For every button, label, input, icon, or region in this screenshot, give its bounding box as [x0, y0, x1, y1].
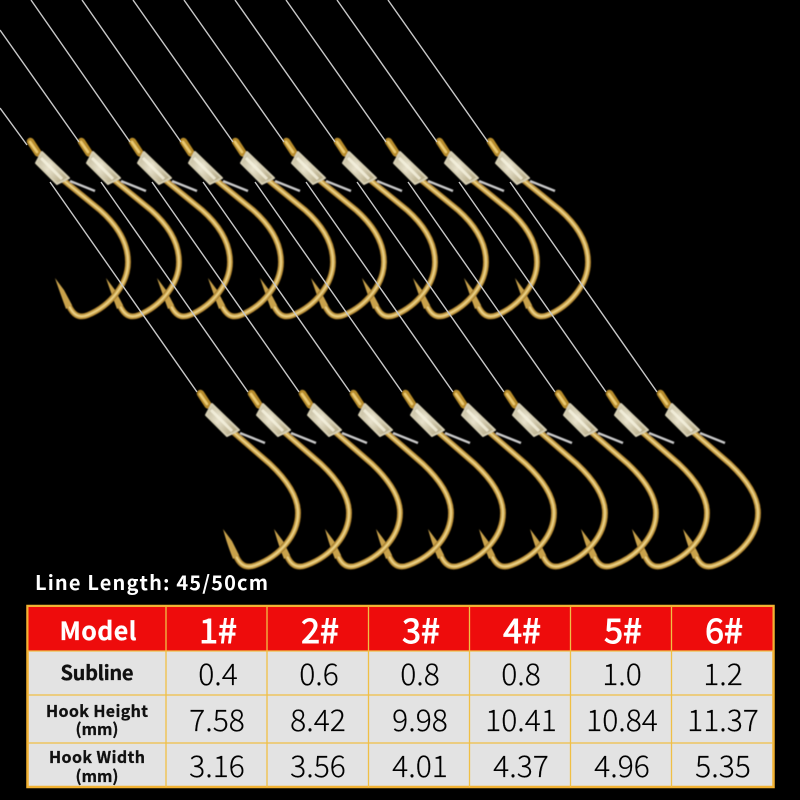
hook height row: 11.37 [687, 696, 759, 740]
hook bottom 5 [405, 394, 503, 567]
hook width row: 4.96 [594, 742, 650, 786]
hook width row [49, 742, 751, 787]
header row: 2# [301, 604, 339, 653]
subline row [60, 650, 743, 694]
hook top 10 [490, 142, 588, 316]
grid lines [28, 607, 773, 787]
header row: 3# [402, 604, 440, 653]
hook top 5 [235, 142, 333, 316]
specification table [28, 604, 774, 787]
hook height row: (mm) [76, 716, 118, 740]
hook height row: 10.84 [586, 696, 658, 740]
subline row: 0.8 [501, 650, 541, 694]
hook width row: (mm) [76, 763, 118, 787]
hook height row: 9.98 [392, 696, 448, 740]
header row: 4# [503, 604, 541, 653]
line length caption: Line Length: 45/50cm [35, 567, 268, 596]
hook width row: 3.16 [189, 742, 245, 786]
hook top 2 [81, 142, 179, 316]
hook width row: 4.37 [493, 742, 549, 786]
table header band [28, 607, 772, 651]
hook bottom 4 [353, 394, 451, 567]
hook width row: Hook Width [49, 744, 145, 768]
hook width row: 4.01 [392, 742, 448, 786]
hook width row: 5.35 [695, 742, 751, 786]
header row: Model [60, 612, 137, 648]
hook bottom 10 [660, 394, 758, 567]
subline row: 0.6 [299, 650, 339, 694]
hook bottom 2 [251, 394, 349, 567]
hook height row [46, 696, 759, 740]
hook bottom 1 [200, 394, 298, 567]
hooks: top row [30, 142, 588, 316]
header row: 1# [199, 604, 237, 653]
hook top 4 [183, 142, 281, 316]
hook height row: 10.41 [485, 696, 557, 740]
subline row: Subline [60, 657, 134, 686]
fishing lines [0, 0, 657, 392]
hook top 7 [337, 142, 435, 316]
hook bottom 7 [507, 394, 605, 567]
subline row: 0.4 [198, 650, 238, 694]
hook height row: 7.58 [189, 696, 245, 740]
header row: 6# [705, 604, 743, 653]
hook bottom 6 [456, 394, 554, 567]
subline row: 0.8 [400, 650, 440, 694]
hook width row: 3.56 [290, 742, 346, 786]
header row: 5# [604, 604, 642, 653]
hook top 8 [388, 142, 486, 316]
hook top 6 [286, 142, 384, 316]
subline row: 1.2 [703, 650, 743, 694]
hook height row: Hook Height [46, 698, 148, 722]
subline row: 1.0 [602, 650, 642, 694]
hook top 1 [30, 142, 128, 316]
hook top 3 [132, 142, 230, 316]
hook top 9 [439, 142, 537, 316]
header row [60, 604, 743, 653]
hook bottom 9 [609, 394, 707, 567]
hook bottom 8 [558, 394, 656, 567]
hooks: bottom row [200, 394, 758, 567]
table frame [28, 606, 774, 787]
hook height row: 8.42 [290, 696, 346, 740]
hook bottom 3 [302, 394, 400, 567]
